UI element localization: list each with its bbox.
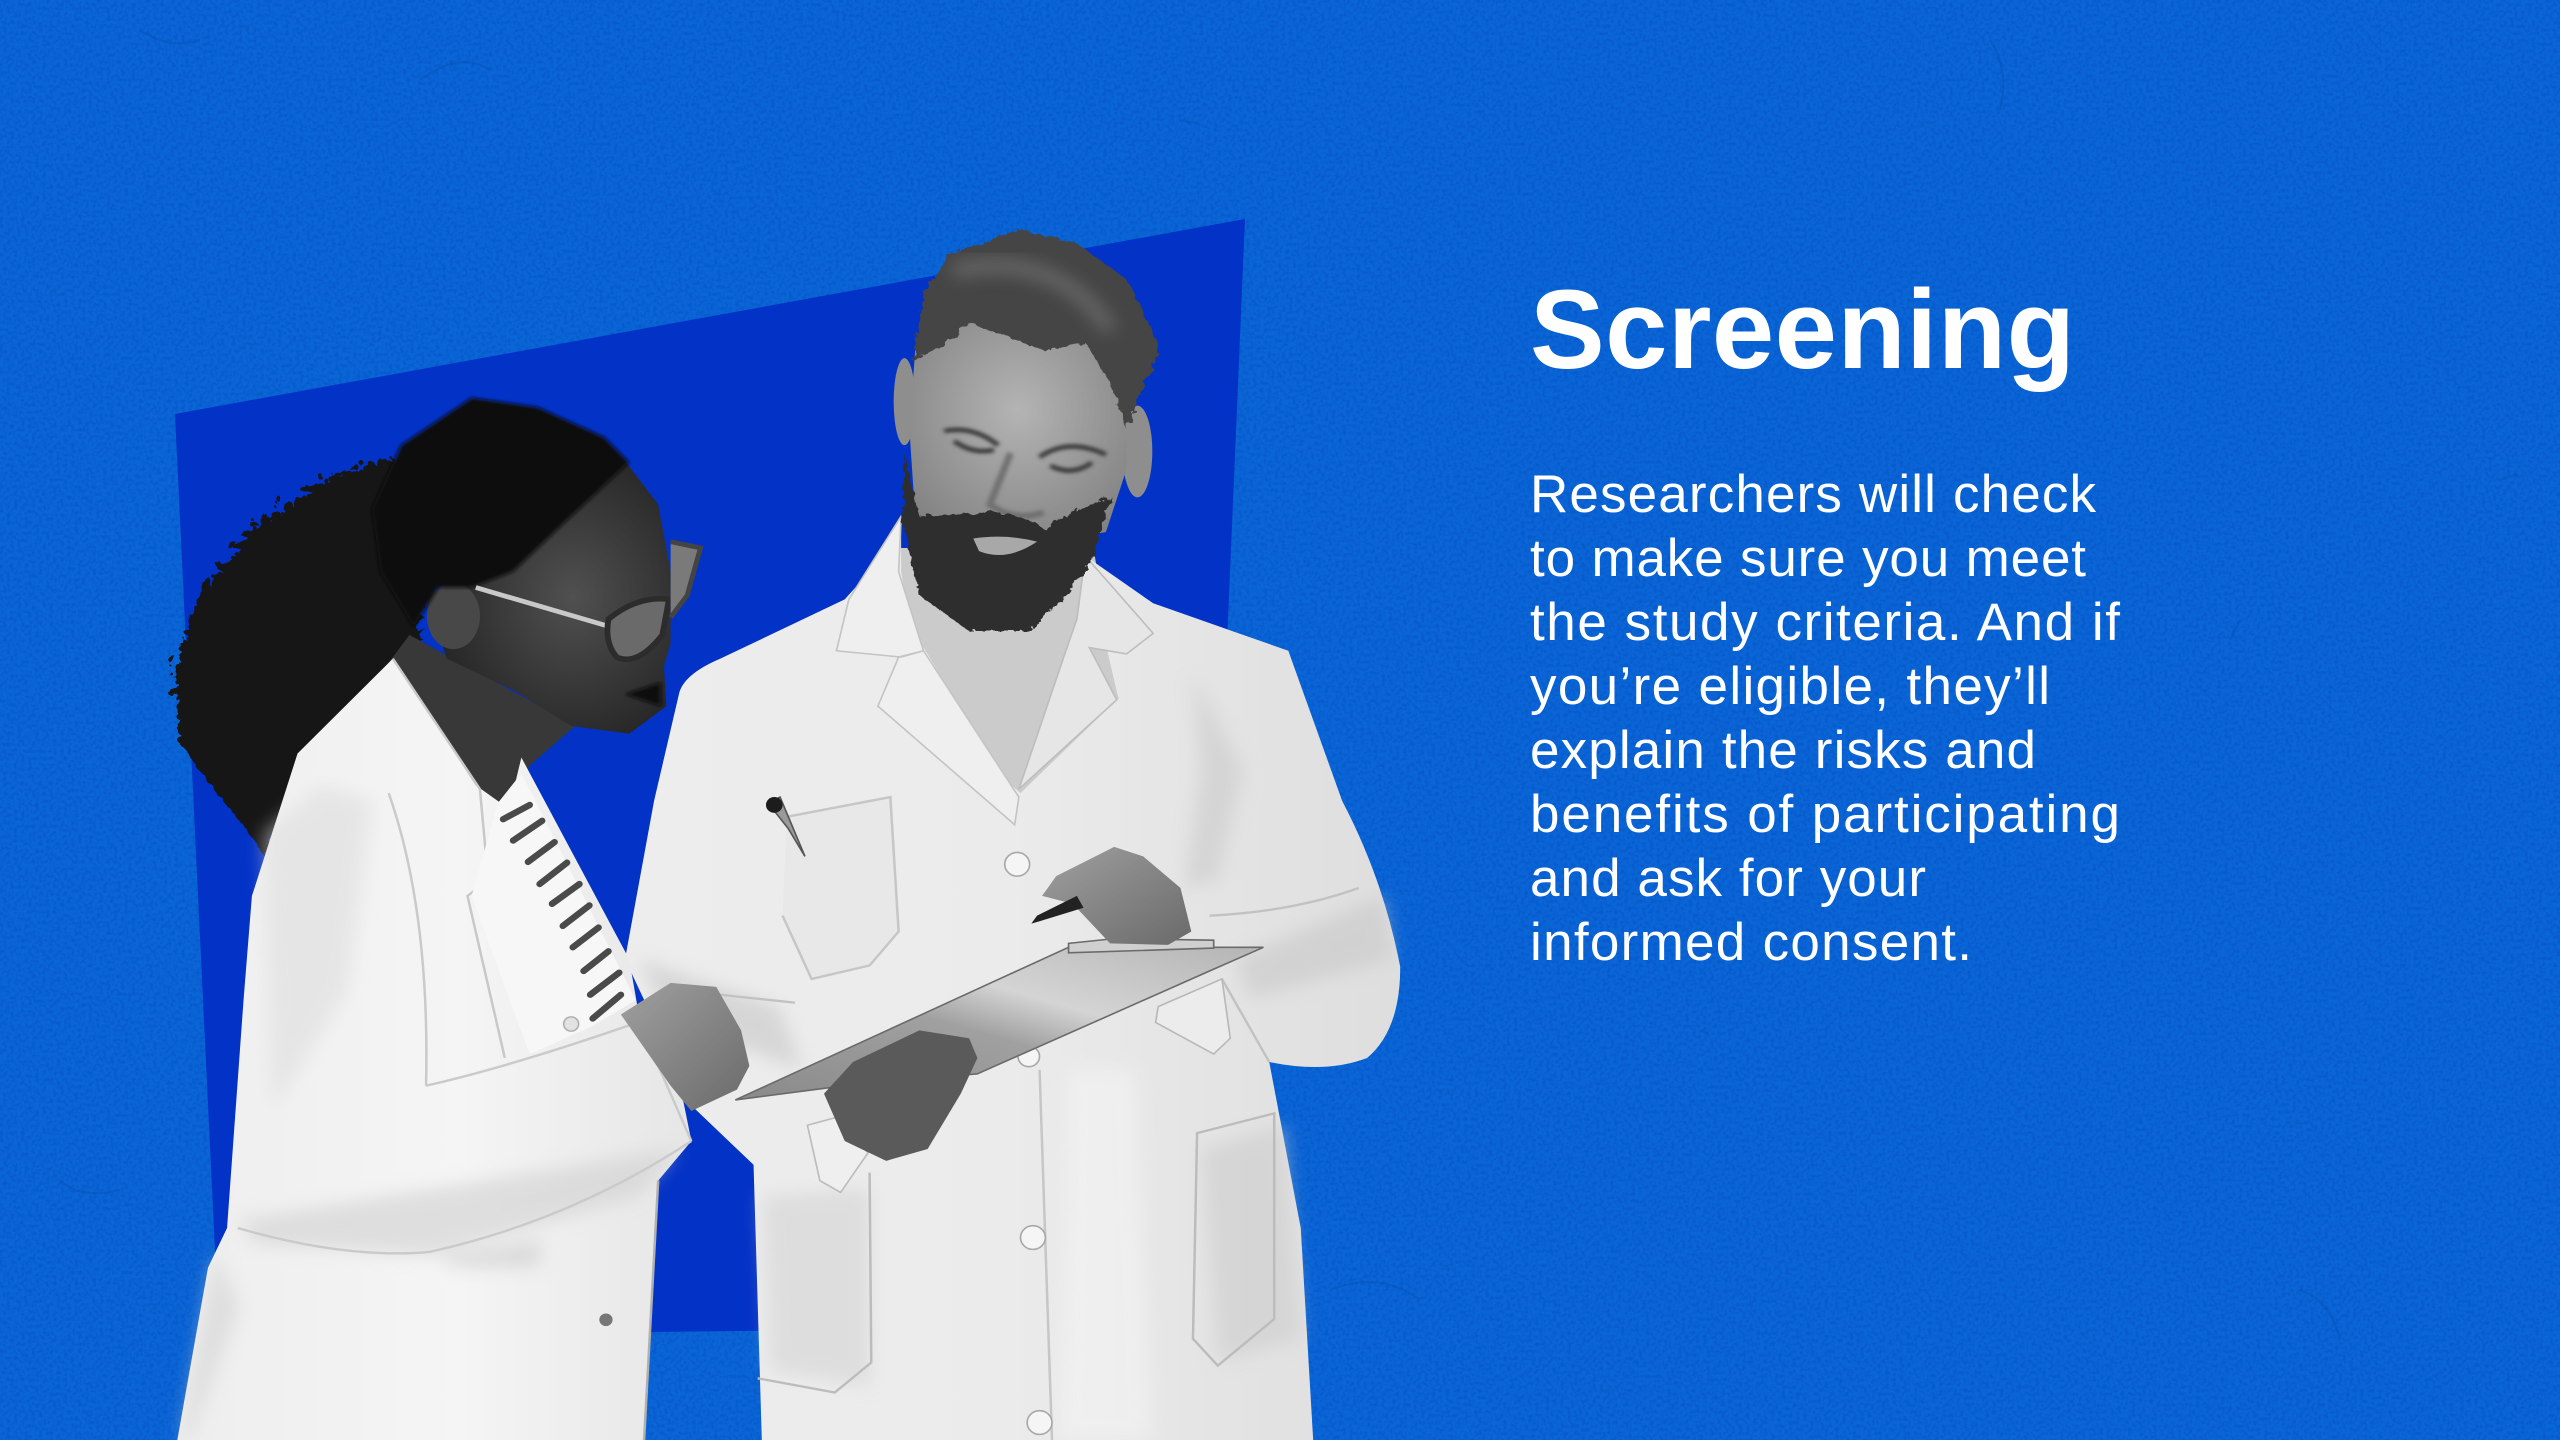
man: hair (913, 230, 1160, 429)
woman: lips (625, 682, 661, 706)
body text: screening description (1530, 465, 2120, 972)
woman: face (426, 461, 671, 734)
woman: sleeve fold shading (181, 785, 679, 1440)
heading: Screening: Screening (1530, 267, 2075, 392)
man: eyebrows and eyes (944, 430, 1106, 471)
man: sleeve cuff (1156, 979, 1230, 1054)
woman: lab coat (177, 659, 691, 1440)
woman: sleeve outline (238, 793, 691, 1253)
woman: neck (389, 635, 575, 809)
man: face (909, 319, 1127, 548)
man: pointing hand with pen (1031, 847, 1191, 945)
man: lower pockets (758, 1113, 1274, 1393)
body text: screening description: Researchers will check (1530, 465, 2096, 524)
man: sleeve seams (720, 888, 1359, 1062)
man: nose (990, 453, 1044, 516)
man: lower-hand cuff (807, 1117, 868, 1192)
man: lab coat (625, 515, 1400, 1440)
man: lower hand holding clipboard (824, 1030, 977, 1161)
photo: two researchers in lab coats (170, 230, 1400, 1440)
body text: screening description: benefits of participating (1530, 785, 2120, 844)
man: beard (903, 453, 1112, 631)
dark blue skewed panel behind people (175, 219, 1245, 1355)
body text: screening description: the study criteria. And if (1530, 593, 2120, 652)
body text: screening description: explain the risks and (1530, 721, 2036, 780)
body text: screening description: you’re eligible, they’ll (1530, 657, 2050, 716)
woman: female researcher (170, 398, 749, 1440)
woman: glasses (476, 542, 700, 659)
clipboard clip (1069, 939, 1214, 953)
man: pen in pocket (766, 797, 805, 856)
man: buttons (1005, 852, 1052, 1434)
clipboard (735, 939, 1263, 1100)
man: chest pocket (783, 797, 899, 979)
man: male researcher (625, 230, 1400, 1440)
woman: coat collar line (393, 659, 505, 1058)
woman: coat snap (599, 1313, 613, 1326)
man: mouth (973, 537, 1037, 555)
man: left lapel (836, 516, 1019, 825)
man: right lapel (1019, 556, 1153, 789)
man: coat fold shading (637, 674, 1392, 1440)
woman: gloved hand (621, 983, 749, 1111)
woman: coat edge (644, 1181, 658, 1440)
man: grey hair highlights (953, 266, 1110, 330)
body text: screening description: informed consent. (1530, 913, 1972, 972)
body text: screening description: to make sure you meet (1530, 529, 2086, 588)
man: neck and shirt (886, 548, 1118, 809)
woman: striped shirt (472, 773, 636, 1054)
woman: ear (427, 583, 480, 649)
woman: coat button (564, 1017, 579, 1031)
man: placket line (1040, 1070, 1052, 1440)
woman: hair (372, 398, 629, 627)
body text: screening description: and ask for your (1530, 849, 1926, 908)
woman: curly ponytail (170, 453, 422, 856)
man: ears (894, 358, 1152, 497)
